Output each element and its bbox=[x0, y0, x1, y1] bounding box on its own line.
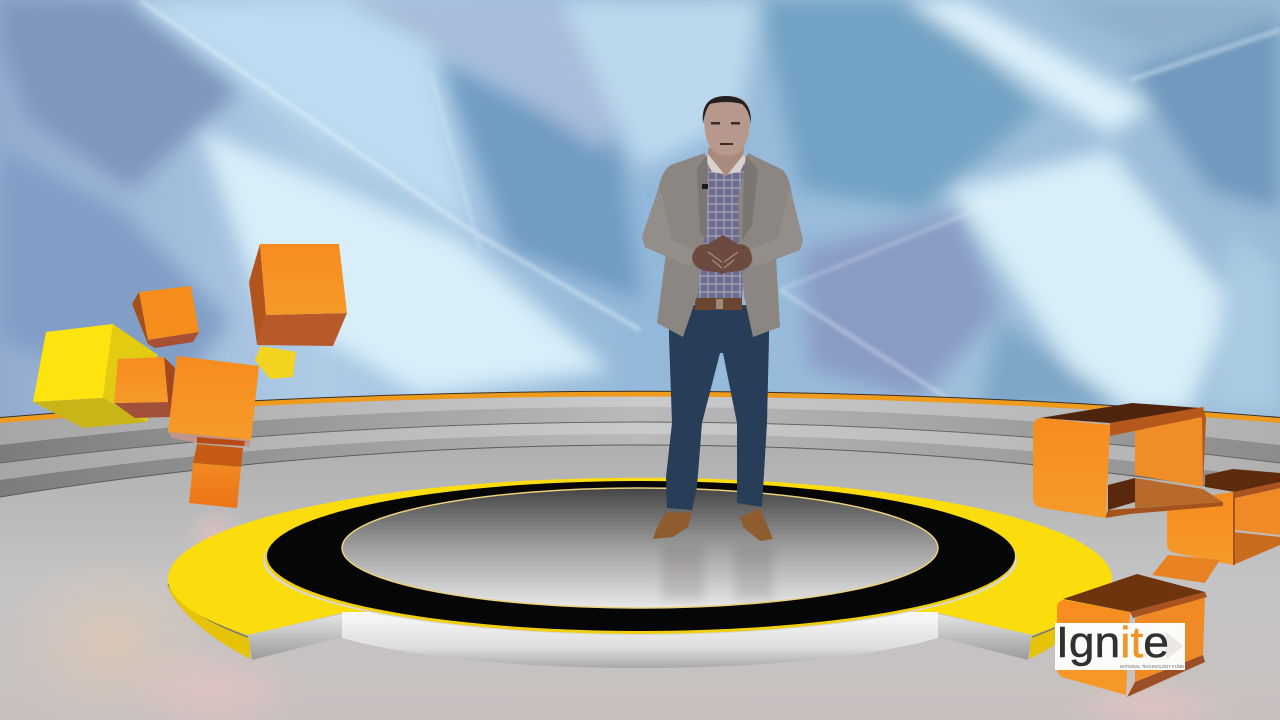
small orange cube bbox=[132, 286, 199, 348]
stage: black ring bbox=[267, 481, 1015, 631]
small yellow cube bbox=[255, 346, 296, 379]
stage: inner platform bbox=[342, 488, 938, 608]
presenter reflection bbox=[662, 545, 773, 600]
eyes and mouth bbox=[711, 122, 740, 145]
yellow cube bbox=[33, 324, 158, 428]
floor reflection glow bbox=[0, 505, 1240, 720]
silver end left bbox=[248, 614, 342, 660]
silver end right bbox=[938, 614, 1032, 660]
orange rim line bbox=[0, 391, 1280, 420]
left cube cluster bbox=[33, 244, 347, 508]
head bbox=[704, 96, 750, 156]
lapels bbox=[697, 155, 758, 240]
large orange cube bbox=[249, 244, 347, 346]
floor bbox=[0, 440, 1280, 720]
ring side wall left bbox=[167, 586, 250, 659]
stage: ring trim bbox=[263, 485, 1017, 635]
connector bbox=[1152, 555, 1220, 583]
stage: white front rim bbox=[342, 612, 938, 668]
shoes bbox=[653, 508, 773, 541]
hair bbox=[703, 96, 751, 124]
lower orange cube bbox=[189, 444, 243, 508]
collar bbox=[706, 154, 746, 174]
middle shelf bbox=[1167, 469, 1280, 565]
jeans bbox=[666, 305, 769, 510]
logo: Ignite bbox=[1055, 618, 1185, 670]
mic bbox=[702, 184, 708, 189]
hands bbox=[692, 235, 752, 274]
stage: yellow ring bbox=[167, 478, 1113, 660]
lower shelf bbox=[1057, 574, 1207, 697]
ring top surface bbox=[168, 478, 1112, 635]
ring side wall right bbox=[1030, 586, 1113, 659]
centre orange cube bbox=[168, 356, 259, 447]
mid orange cube bbox=[114, 357, 175, 418]
right orange shelves bbox=[1033, 403, 1280, 697]
belt bbox=[695, 298, 742, 310]
presenter bbox=[642, 96, 803, 541]
logo wordmark: Ignite bbox=[1056, 618, 1169, 667]
shirt bbox=[696, 160, 745, 302]
top shelf bbox=[1033, 403, 1223, 518]
background wall with crystal pattern bbox=[0, 0, 1280, 425]
sleeves bbox=[642, 188, 694, 267]
logo tagline: NATIONAL TECHNOLOGY FUND bbox=[1120, 664, 1184, 669]
blazer right bbox=[738, 153, 803, 337]
blazer left bbox=[642, 153, 708, 337]
neck bbox=[708, 148, 744, 176]
curved back steps bbox=[0, 396, 1280, 497]
